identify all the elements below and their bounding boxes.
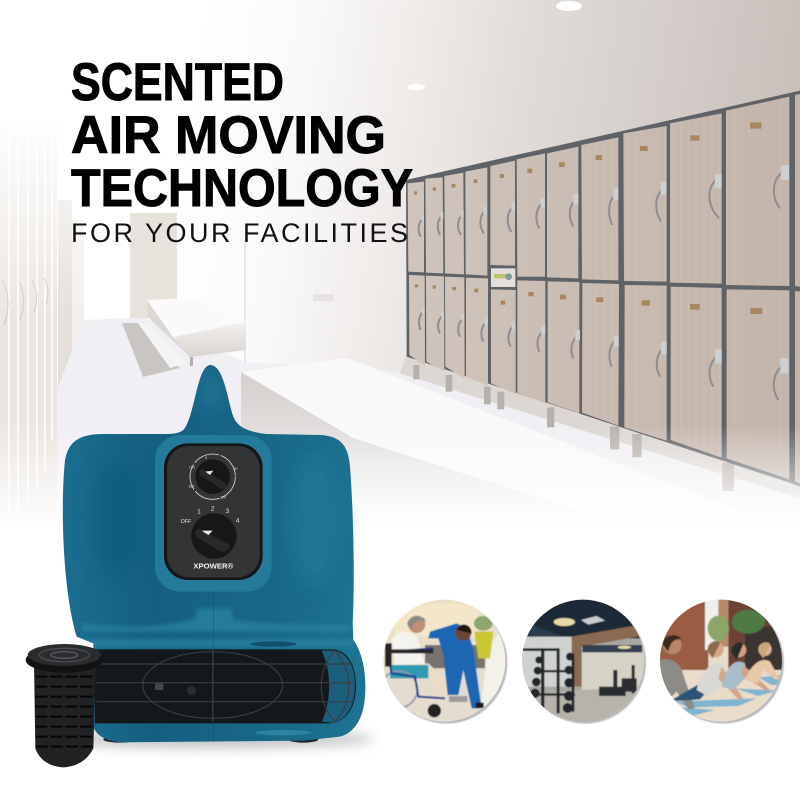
photo: caregiver and wheelchair xyxy=(381,597,508,724)
timer dial: ON xyxy=(189,466,195,470)
locker legs xyxy=(413,365,734,491)
ceiling light xyxy=(556,1,582,11)
speed dial xyxy=(181,505,240,559)
handle plates xyxy=(421,165,789,373)
cartridge slats xyxy=(35,677,95,747)
blower body xyxy=(63,365,365,742)
photo: gym xyxy=(520,597,647,724)
control bezel xyxy=(155,435,272,592)
photo: yoga class xyxy=(658,597,785,724)
timer dial: 60 xyxy=(233,467,237,471)
timer dial: 180 xyxy=(188,485,194,489)
far door xyxy=(130,213,177,318)
locker doors xyxy=(408,94,800,483)
timer dial xyxy=(188,454,237,500)
blower shadow xyxy=(55,730,375,748)
speed dial: 1 xyxy=(197,508,201,515)
circular photos xyxy=(381,597,785,724)
outlet grille xyxy=(97,650,356,722)
air outlet xyxy=(85,649,356,723)
blower feet xyxy=(103,736,318,743)
locker handles xyxy=(419,173,782,400)
brand logo: XPOWER® xyxy=(193,562,234,571)
speed dial: 4 xyxy=(236,518,240,525)
wall corner xyxy=(244,240,246,362)
cartridge cap xyxy=(26,647,103,673)
under-locker shadow xyxy=(400,353,800,498)
wall socket xyxy=(313,294,334,301)
speed dial: 3 xyxy=(226,508,230,515)
large bench xyxy=(241,358,790,530)
speed dial: OFF xyxy=(181,519,192,525)
product: XPOWER air mover xyxy=(63,365,365,743)
locker frame xyxy=(406,91,800,487)
small bench xyxy=(122,298,246,377)
floor xyxy=(0,318,800,530)
speed dial: 2 xyxy=(211,505,215,512)
timer dial: 120 xyxy=(220,496,226,500)
title line: air moving: AIR MOVING xyxy=(71,106,386,165)
ceiling spot xyxy=(407,84,425,90)
timer dial: 0 xyxy=(205,456,207,460)
scent cartridge xyxy=(26,644,103,767)
title xyxy=(71,53,413,218)
locker wall xyxy=(400,91,800,498)
keypad panel xyxy=(491,268,515,287)
title line: technology: TECHNOLOGY xyxy=(71,159,413,218)
left lockers xyxy=(0,110,90,520)
subtitle: FOR YOUR FACILITIES xyxy=(71,218,408,248)
locker number tags xyxy=(414,122,762,314)
control panel xyxy=(164,443,263,580)
body shading xyxy=(80,367,353,735)
title line: scented: SCENTED xyxy=(71,53,284,112)
bottom fade to white xyxy=(0,425,800,530)
